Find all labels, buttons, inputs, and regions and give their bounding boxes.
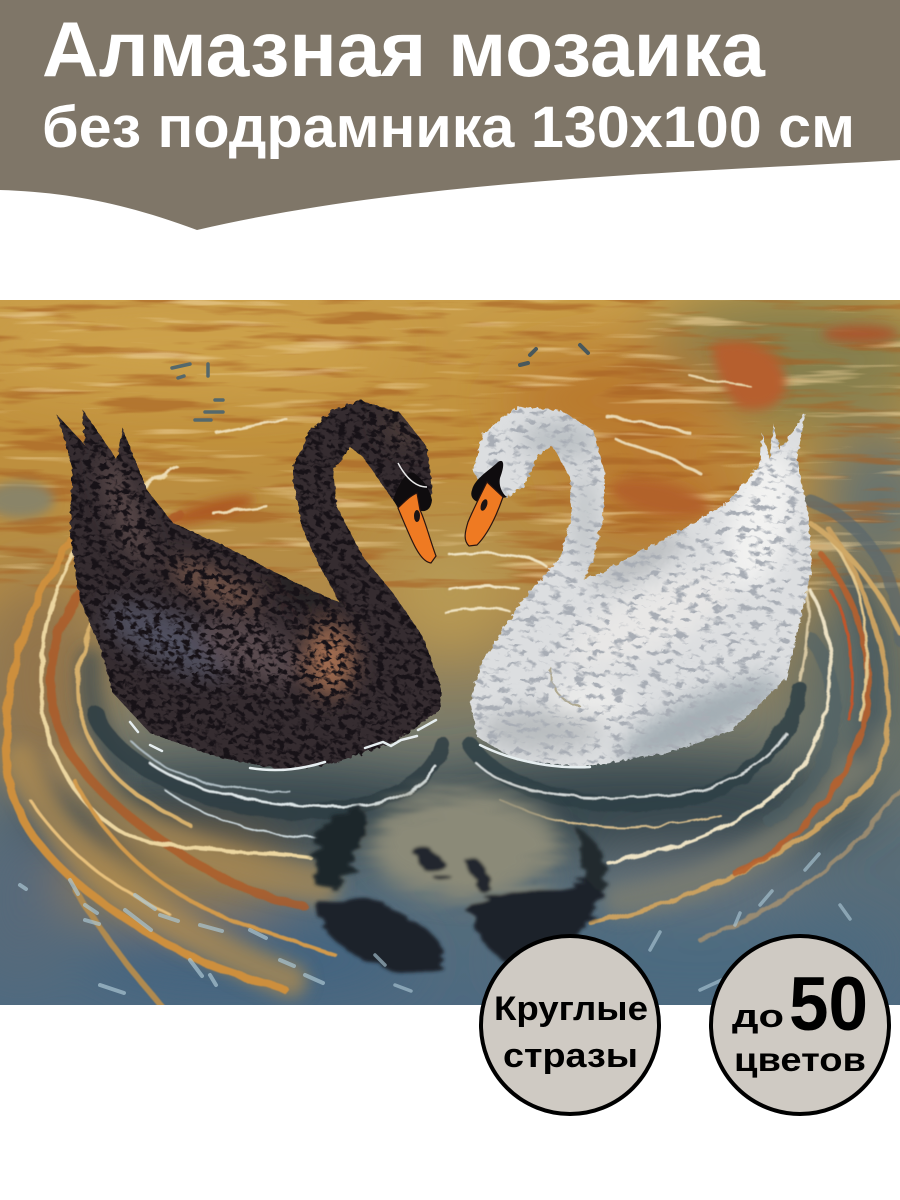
subtitle: без подрамника 130х100 см (42, 95, 855, 160)
left arcs (6, 500, 285, 990)
badge text (494, 990, 648, 1075)
white swan body (470, 406, 812, 766)
soft gold bands (20, 580, 874, 980)
painting: two swans on a rippling pond (0, 290, 900, 1010)
badge text (732, 962, 868, 1078)
outer slate bands (810, 500, 900, 640)
badge text: 50 (789, 962, 868, 1047)
badge text: Круглые (494, 990, 648, 1028)
header banner (0, 0, 900, 230)
concentric ripples (6, 376, 900, 1010)
reflection of the swans (312, 790, 607, 973)
dark inner ripples, white swan (470, 690, 800, 804)
upper streaks (147, 420, 287, 513)
title: Алмазная мозаика (42, 5, 766, 93)
paint dabs on water (20, 345, 850, 993)
waterline splashes (130, 720, 590, 770)
white swan head markings and beak (465, 461, 508, 546)
white swan (470, 406, 812, 766)
right arcs (591, 530, 889, 923)
badge text: стразы (503, 1037, 638, 1075)
water background (0, 290, 900, 1010)
black swan body (56, 399, 442, 769)
badge: up to 50 colours (711, 936, 889, 1114)
black swan (56, 399, 442, 769)
badge text: цветов (734, 1041, 866, 1078)
dark inner ripples, black swan (95, 713, 442, 812)
badge text: до (732, 998, 784, 1034)
badge: round rhinestones (481, 936, 659, 1114)
black swan head markings and beak (393, 463, 436, 563)
